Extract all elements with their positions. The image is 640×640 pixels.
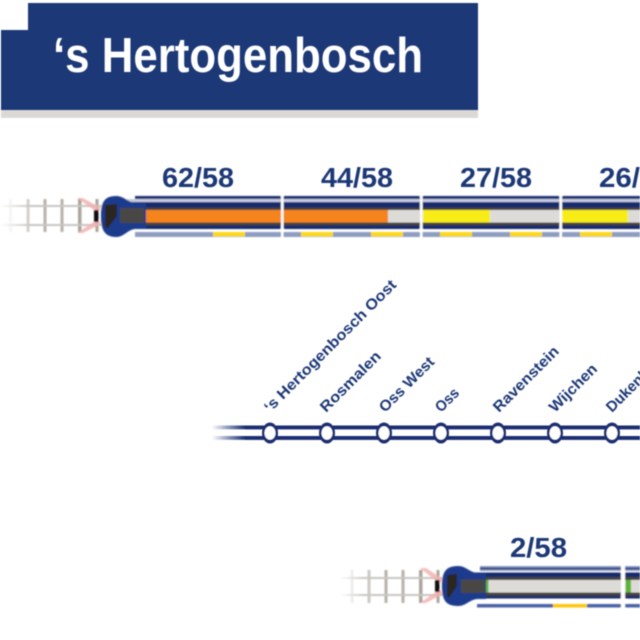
occupancy labels: top train: 62/58	[162, 162, 234, 193]
occupancy labels: top train: 44/58	[321, 162, 393, 193]
station markers	[262, 422, 620, 444]
double track line	[212, 426, 640, 440]
green occupancy bars	[486, 580, 631, 592]
occupancy labels: top train	[162, 162, 640, 193]
icon: locomotive head	[94, 196, 146, 237]
station labels: Oss West	[376, 354, 438, 416]
station labels: Ravenstein	[490, 343, 563, 416]
icon: headlight beams	[77, 198, 101, 233]
icon: track	[340, 570, 446, 604]
occupancy label: bottom train: 2/58	[510, 532, 567, 563]
station labels	[261, 277, 640, 416]
title: ‘s Hertogenbosch	[53, 29, 423, 83]
icon: headlight beams	[420, 568, 443, 603]
station labels: ‘s Hertogenbosch Oost	[261, 277, 400, 416]
icon: locomotive head	[435, 566, 486, 606]
station line	[212, 422, 640, 444]
carriages	[125, 195, 640, 238]
bottom train	[340, 564, 640, 609]
station labels: Wijchen	[546, 361, 601, 416]
station labels: Oss	[432, 385, 463, 416]
header banner	[1, 3, 478, 118]
door markers	[213, 232, 612, 236]
orange and yellow occupancy bars	[145, 210, 628, 222]
icon: track	[0, 198, 104, 234]
top train	[0, 195, 640, 238]
carriages	[470, 564, 640, 609]
door marker	[553, 604, 587, 608]
occupancy labels: top train: 26/	[599, 162, 640, 193]
station labels: Rosmalen	[317, 348, 385, 416]
occupancy labels: top train: 27/58	[460, 162, 532, 193]
